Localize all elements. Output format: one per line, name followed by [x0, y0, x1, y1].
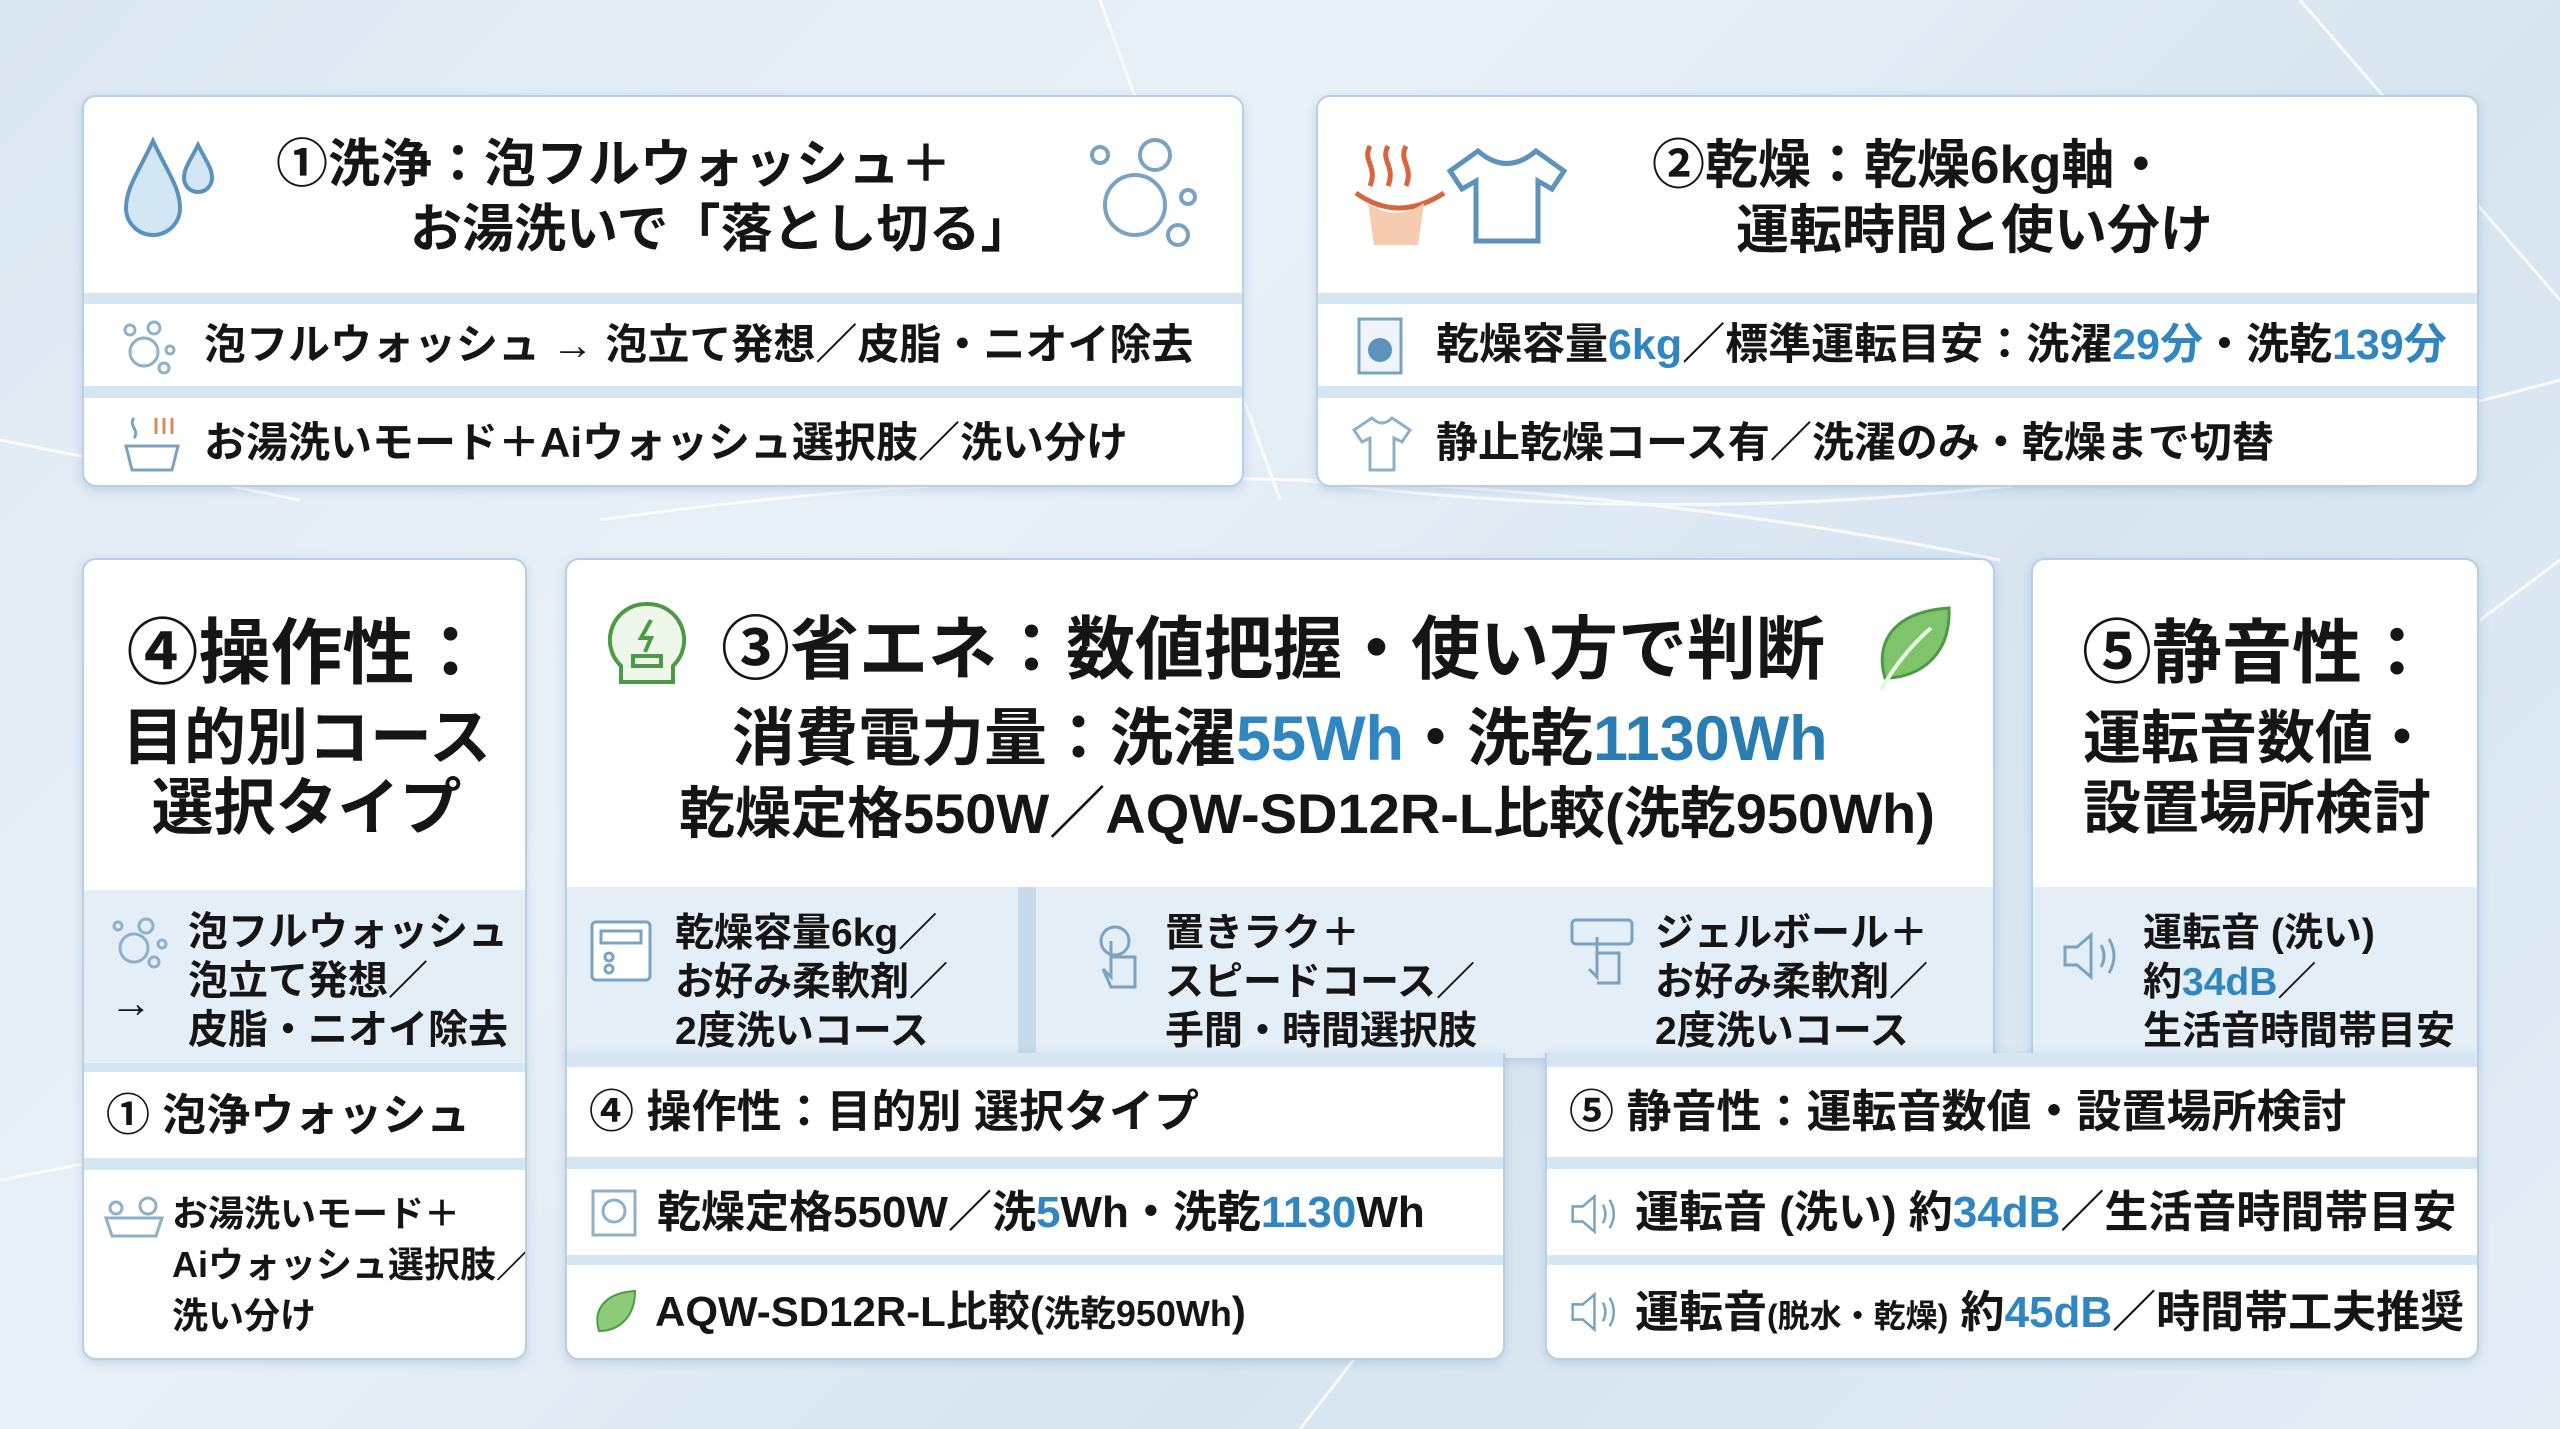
row: rating: 乾燥定格550W／洗5Wh・洗乾1130Wh — [657, 1188, 1425, 1237]
panel: 1 washing — [82, 95, 1244, 487]
row: static dry: 静止乾燥コース有／洗濯のみ・乾燥まで切替 — [1436, 419, 2274, 466]
heading: 目的別コース — [122, 704, 491, 773]
row: hot water: Aiウォッシュ選択肢／ — [172, 1244, 527, 1285]
panel: 4 operability — [82, 558, 527, 1360]
column 1: 2度洗いコース — [675, 1010, 929, 1053]
heading: ④操作性： — [126, 614, 486, 694]
text: rating: 乾燥定格550W／AQW-SD12R-L比較(洗乾950Wh) — [679, 782, 1935, 845]
column 3: お好み柔軟剤／ — [1655, 961, 1928, 1004]
column 3: 2度洗いコース — [1655, 1010, 1909, 1053]
row: hot water: 洗い分け — [172, 1295, 316, 1336]
row: noise — [2033, 887, 2481, 1060]
row: foam: → — [110, 979, 152, 1026]
column 2: 置きラク＋ — [1165, 912, 1360, 955]
panel: 3 energy saving — [565, 558, 1995, 1058]
column 1: お好み柔軟剤／ — [675, 961, 948, 1004]
panel: 4 summary bottom-left — [565, 1053, 1505, 1360]
panel: 5 summary bottom-right — [1545, 1053, 2479, 1360]
heading: ⑤静音性： — [2082, 614, 2432, 692]
row: comparison: AQW-SD12R-L比較(洗乾950Wh) — [655, 1288, 1246, 1335]
heading: 運転音数値・ — [2083, 706, 2431, 771]
column 1 — [590, 912, 948, 1053]
row: foam: 皮脂・ニオイ除去 — [188, 1008, 508, 1052]
columns row — [567, 887, 1997, 1060]
icon: meter — [608, 602, 686, 684]
row: wash noise: 運転音 (洗い) 約34dB／生活音時間帯目安 — [1635, 1188, 2456, 1237]
text: consumption: 消費電力量：洗濯55Wh・洗乾1130Wh — [732, 704, 1828, 774]
row: awa wash: ① 泡浄ウォッシュ — [106, 1091, 470, 1140]
heading: ②乾燥：乾燥6kg軸・ — [1652, 136, 2167, 195]
panel: 5 quietness — [2031, 558, 2479, 1058]
row: foam: 泡立て発想／ — [188, 959, 428, 1003]
icon: bubbles — [1090, 138, 1197, 247]
row: foam: 泡フルウォッシュ → 泡立て発想／皮脂・ニオイ除去 — [204, 321, 1193, 368]
row: quietness: ⑤ 静音性：運転音数値・設置場所検討 — [1569, 1086, 2347, 1137]
row: hot water: お湯洗いモード＋ — [172, 1193, 460, 1234]
row: noise: 約34dB／ — [2143, 961, 2316, 1004]
column 2 — [1100, 912, 1477, 1053]
heading: お湯洗いで「落とし切る」 — [410, 201, 1032, 259]
row: foam — [84, 890, 529, 1063]
row: operability: ④ 操作性：目的別 選択タイプ — [589, 1086, 1199, 1137]
column 2: 手間・時間選択肢 — [1165, 1010, 1477, 1053]
heading — [2082, 614, 2432, 841]
icon: leaf — [1880, 606, 1951, 691]
heading: ①洗浄：泡フルウォッシュ＋ — [276, 136, 952, 194]
heading: 選択タイプ — [151, 774, 462, 843]
heading — [276, 136, 1032, 259]
row: hot water — [104, 1193, 527, 1336]
row: capacity: 乾燥容量6kg／標準運転目安：洗濯29分・洗乾139分 — [1436, 321, 2447, 369]
row: foam: 泡フルウォッシュ — [188, 910, 508, 954]
row: dry noise: 運転音(脱水・乾燥) 約45dB／時間帯工夫推奨 — [1635, 1288, 2464, 1337]
icon: steam and shirt — [1354, 144, 1568, 245]
column 2: スピードコース／ — [1165, 961, 1475, 1004]
heading — [1652, 136, 2213, 260]
heading — [122, 614, 491, 843]
column 3: ジェルボール＋ — [1655, 912, 1928, 955]
heading: ③省エネ：数値把握・使い方で判断 — [721, 611, 1825, 688]
heading: 運転時間と使い分け — [1736, 201, 2213, 260]
column 1: 乾燥容量6kg／ — [675, 912, 937, 955]
row: hot water: お湯洗いモード＋Aiウォッシュ選択肢／洗い分け — [204, 419, 1128, 466]
row: noise: 運転音 (洗い) — [2143, 912, 2375, 955]
column 3 — [1570, 912, 1928, 1053]
heading: 設置場所検討 — [2083, 776, 2431, 841]
icon: water drops — [124, 136, 214, 237]
panel: 2 drying — [1316, 95, 2479, 487]
row: noise: 生活音時間帯目安 — [2143, 1010, 2455, 1053]
